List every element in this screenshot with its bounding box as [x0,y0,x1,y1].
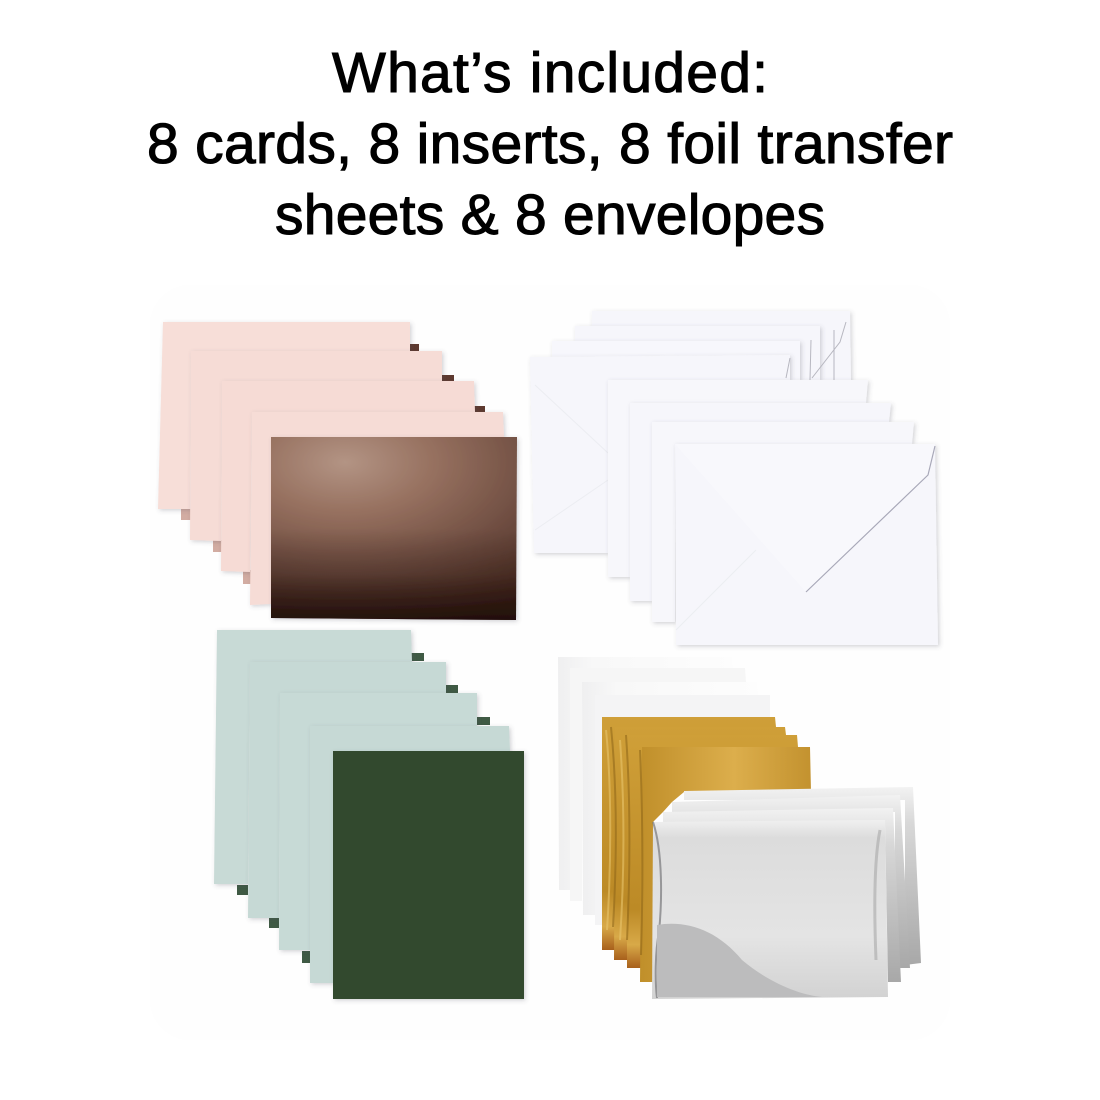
panel: rose cards with brown foil inserts [158,322,517,620]
brown foil card [271,437,517,620]
front envelope with flap [675,444,938,645]
dark green card [333,751,524,999]
panel: white envelopes [530,311,938,645]
gold foil sheets [602,717,811,982]
background panel [150,285,950,1040]
panel: foil transfer sheets [558,657,921,999]
silver foil sheets [652,787,921,999]
title: 8 cards, 8 inserts, 8 foil transfer [147,112,953,176]
title [147,41,953,247]
title: What’s included: [332,41,768,105]
white foil sheets [558,657,770,925]
panel: mint cards with dark green inserts [214,630,524,999]
title: sheets & 8 envelopes [275,183,825,247]
